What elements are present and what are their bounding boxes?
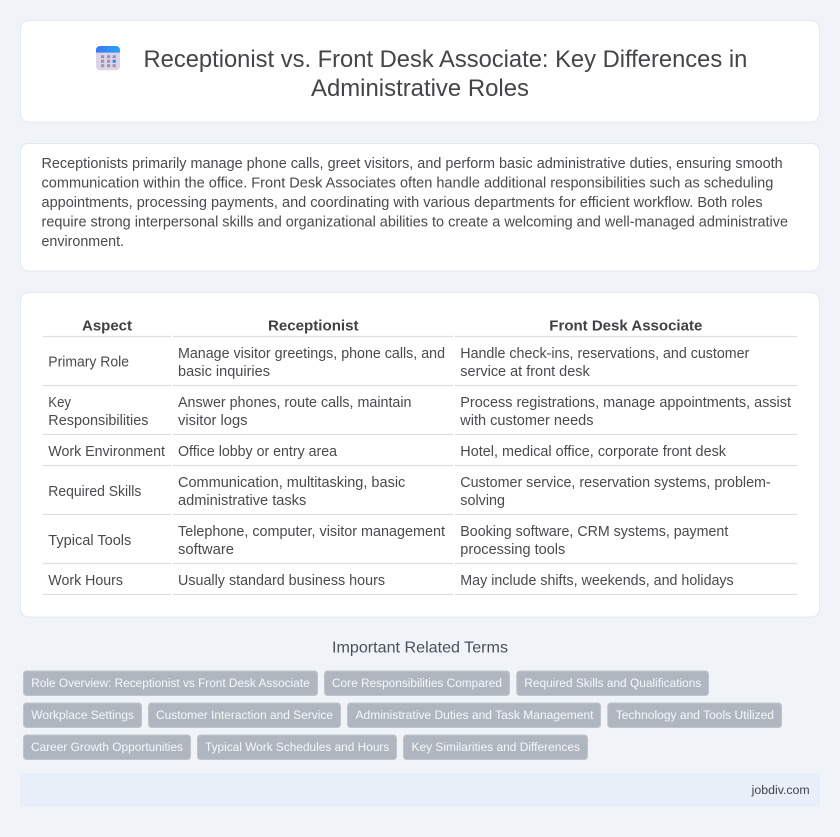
panel: comparison table — [20, 292, 820, 617]
row: typical tools: Typical Tools — [48, 533, 131, 549]
row: required skills: administrative tasks — [178, 493, 306, 509]
row: work hours: Work Hours — [48, 573, 123, 589]
intro paragraph: communication within the office. Front Desk Associates often handle additional responsibilities such as scheduling — [42, 176, 773, 192]
row: primary role: Primary Role — [48, 355, 129, 371]
intro paragraph: appointments, processing payments, and coordinating with various departments for efficient workflow. Both roles — [42, 195, 763, 211]
table header — [82, 318, 702, 335]
tag: role overview — [24, 671, 318, 696]
row: primary role: basic inquiries — [178, 364, 270, 380]
tag: core responsibilities: Core Responsibilities Compared — [332, 676, 502, 690]
intro paragraph — [42, 156, 788, 250]
row: typical tools: software — [178, 542, 234, 558]
title — [144, 46, 747, 102]
tag: required skills — [517, 671, 708, 696]
row: work environment: Work Environment — [48, 444, 165, 460]
row: work hours: May include shifts, weekends, and holidays — [460, 573, 734, 589]
row: key responsibilities: visitor logs — [178, 413, 248, 429]
row: required skills: Communication, multitasking, basic — [178, 475, 405, 491]
intro paragraph: environment. — [42, 234, 124, 250]
row: required skills: Required Skills — [48, 484, 141, 500]
row: typical tools — [48, 524, 728, 558]
table header: Front Desk Associate — [549, 318, 702, 335]
heading: important related terms: Important Related Terms — [332, 640, 508, 657]
title: Receptionist vs. Front Desk Associate: Key Differences in — [144, 46, 747, 73]
tag: career growth: Career Growth Opportunities — [31, 740, 183, 754]
row: typical tools: processing tools — [460, 542, 565, 558]
row: work hours: Usually standard business hours — [178, 573, 385, 589]
row: work environment: Office lobby or entry area — [178, 444, 338, 460]
title: Administrative Roles — [311, 75, 529, 102]
tag: role overview: Role Overview: Receptionist vs Front Desk Associate — [31, 676, 310, 690]
tag: administrative duties: Administrative Duties and Task Management — [356, 708, 594, 722]
row: typical tools: Booking software, CRM systems, payment — [460, 524, 728, 540]
tag: career growth — [24, 735, 190, 760]
row: required skills — [48, 475, 771, 509]
tag: similarities and differences — [404, 735, 588, 760]
related term tags — [24, 671, 782, 760]
tag: administrative duties — [348, 703, 600, 728]
table header: Receptionist — [268, 318, 359, 335]
tag: work schedules — [198, 735, 396, 760]
row: key responsibilities: Key — [48, 395, 72, 411]
tag: workplace settings: Workplace Settings — [31, 708, 134, 722]
footer bar — [20, 773, 820, 807]
tag: work schedules: Typical Work Schedules and Hours — [205, 740, 389, 754]
tag: customer interaction: Customer Interaction and Service — [156, 708, 333, 722]
row: work environment — [48, 444, 727, 460]
row: key responsibilities: with customer needs — [459, 413, 594, 429]
panel: title card — [20, 20, 820, 122]
tag: workplace settings — [24, 703, 142, 728]
tag: required skills: Required Skills and Qualifications — [524, 676, 701, 690]
row: required skills: solving — [460, 493, 505, 509]
row: key responsibilities: Answer phones, route calls, maintain — [178, 395, 412, 411]
row: work environment: Hotel, medical office, corporate front desk — [460, 444, 727, 460]
table header: Aspect — [82, 318, 132, 335]
row: required skills: Customer service, reservation systems, problem- — [460, 475, 771, 491]
row: key responsibilities: Responsibilities — [48, 413, 148, 429]
footer source label: jobdiv.com — [751, 783, 810, 797]
tag: customer interaction — [148, 703, 340, 728]
row: key responsibilities: Process registrations, manage appointments, assist — [460, 395, 791, 411]
row: typical tools: Telephone, computer, visitor management — [178, 524, 445, 540]
row: primary role: Manage visitor greetings, phone calls, and — [178, 346, 445, 362]
intro paragraph: Receptionists primarily manage phone calls, greet visitors, and perform basic administrative duties, ensuring smooth — [42, 156, 783, 172]
row: work hours — [48, 573, 734, 589]
panel: introduction — [20, 144, 820, 271]
intro paragraph: require strong interpersonal skills and organizational abilities to create a welcoming and well-managed administrative — [42, 214, 788, 230]
tag: technology and tools — [608, 703, 782, 728]
row: primary role: Handle check-ins, reservations, and customer — [460, 346, 749, 362]
tag: core responsibilities — [324, 671, 510, 696]
tag: technology and tools: Technology and Tools Utilized — [616, 708, 774, 722]
row: key responsibilities — [48, 395, 791, 429]
icon: calendar — [96, 46, 120, 70]
row: primary role — [48, 346, 749, 380]
tag: similarities and differences: Key Similarities and Differences — [412, 740, 580, 754]
row: primary role: service at front desk — [460, 364, 590, 380]
